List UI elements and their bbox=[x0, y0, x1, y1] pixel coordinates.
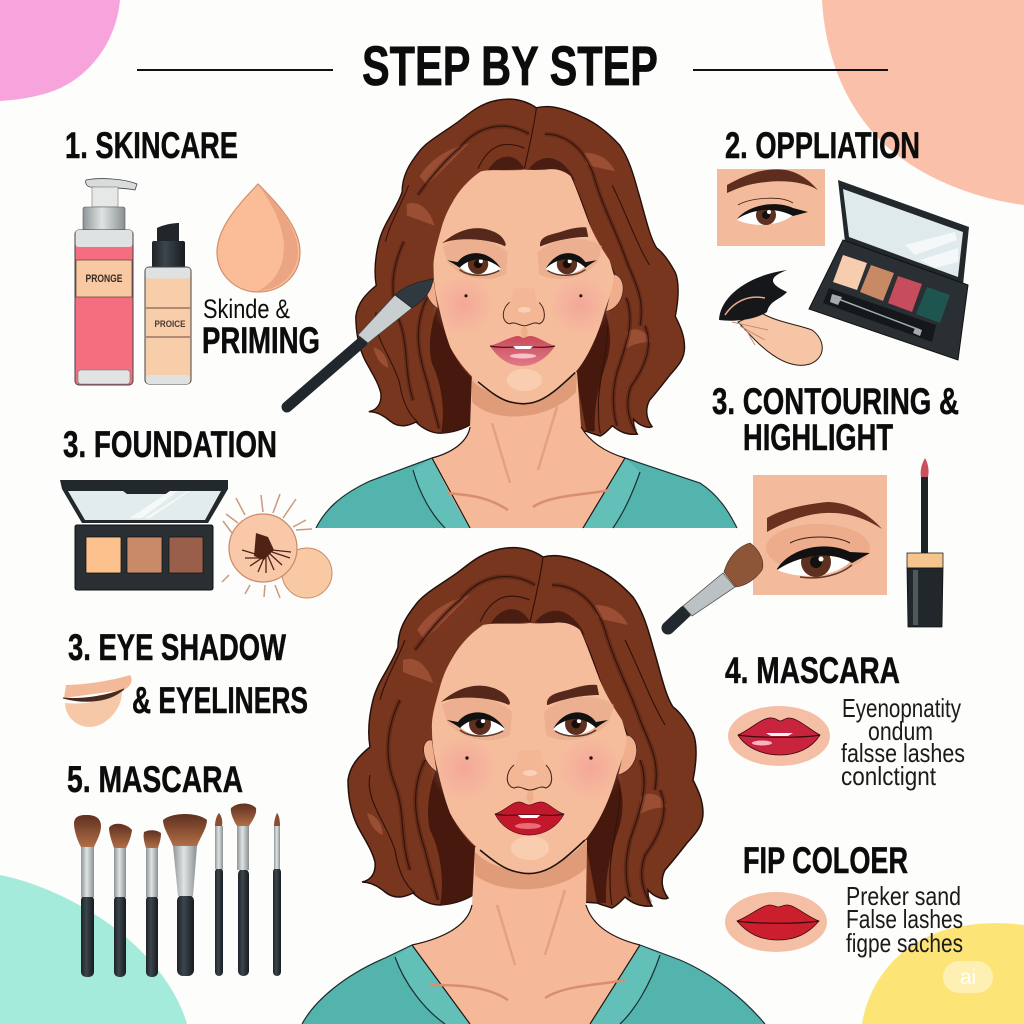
top portrait bbox=[316, 99, 737, 528]
corner blob: peach bbox=[822, 0, 1024, 205]
text: lip colour notes: Preker sand bbox=[846, 881, 961, 911]
text: mascara notes: ondum bbox=[868, 716, 933, 746]
heading: 5. Mascara: 5. MASCARA bbox=[67, 759, 243, 800]
heading: 2. Oppliation: 2. OPPLIATION bbox=[725, 125, 920, 166]
icon: foundation bottle bbox=[145, 223, 191, 384]
icon: pump bottle bbox=[75, 179, 137, 385]
brush 5 bbox=[215, 813, 223, 976]
lips bbox=[495, 802, 564, 835]
text: skin prep: PRIMING bbox=[202, 320, 320, 361]
hair bbox=[356, 99, 685, 436]
icon: red lips bbox=[725, 892, 827, 952]
hair bbox=[348, 548, 703, 908]
title: STEP BY STEP bbox=[362, 34, 658, 97]
icon: powder puff bbox=[222, 494, 332, 598]
shirt bbox=[302, 945, 765, 1024]
watermark: ai bbox=[943, 961, 993, 993]
icon: closed eyelid bbox=[63, 675, 132, 727]
heading: 1. Skincare: 1. SKINCARE bbox=[65, 125, 238, 166]
icon: open palette bbox=[809, 180, 969, 360]
neck and chest bbox=[432, 372, 625, 528]
corner blob: yellow bbox=[862, 923, 1024, 1024]
neck and chest bbox=[412, 840, 640, 1024]
text: mascara notes: Eyenopnatity bbox=[842, 693, 961, 723]
brush 7 bbox=[273, 813, 281, 976]
text: mascara notes: conlctignt bbox=[841, 761, 937, 791]
face bbox=[426, 169, 623, 404]
text: lip colour notes: figpe saches bbox=[846, 928, 963, 958]
icon: foundation palette bbox=[60, 480, 228, 590]
icon: eye swatch bbox=[717, 169, 825, 246]
heading: and eyeliners: & EYELINERS bbox=[132, 680, 308, 721]
heading: Fip Coloer: FIP COLOER bbox=[743, 840, 908, 881]
icon: makeup sponge bbox=[217, 184, 300, 292]
icon: lip gloss wand bbox=[907, 458, 943, 627]
shirt bbox=[316, 458, 737, 528]
heading: 3. Eye shadow: 3. EYE SHADOW bbox=[68, 627, 286, 668]
brush 4 bbox=[163, 814, 207, 976]
heading: 3. Foundation: 3. FOUNDATION bbox=[63, 424, 277, 465]
text: lip colour notes: False lashes bbox=[846, 904, 963, 934]
heading: 4. Mascara: 4. MASCARA bbox=[725, 650, 900, 691]
text: skin prep bbox=[202, 294, 320, 361]
bottle label: PRONGE bbox=[86, 273, 122, 285]
brush 1 bbox=[74, 815, 101, 977]
icon: lash brush bbox=[719, 270, 822, 365]
brush 2 bbox=[109, 824, 132, 977]
lips bbox=[490, 336, 555, 366]
icon: blush brush bbox=[668, 543, 763, 628]
brush 3 bbox=[144, 830, 161, 977]
bottle label: PROICE bbox=[154, 319, 186, 329]
text: skin prep: Skinde & bbox=[203, 294, 290, 324]
text: mascara notes bbox=[841, 693, 965, 791]
brush 6 bbox=[231, 804, 256, 976]
icon: applicator brush bbox=[287, 279, 433, 407]
corner blob: pink bbox=[0, 0, 120, 101]
heading: 3. Contouring and Highlight: HIGHLIGHT bbox=[743, 417, 893, 458]
icon: contour eye swatch bbox=[753, 475, 887, 595]
text: lip colour notes bbox=[846, 881, 963, 958]
corner blob: mint bbox=[0, 875, 187, 1024]
heading: 3. Contouring and Highlight bbox=[712, 381, 959, 458]
bottom portrait bbox=[302, 548, 765, 1024]
icon: brush set bbox=[74, 804, 281, 977]
text: mascara notes: falsse lashes bbox=[841, 738, 965, 768]
watermark: ai: ai bbox=[960, 966, 976, 989]
face bbox=[424, 623, 637, 874]
icon: pink lips bbox=[728, 706, 830, 766]
